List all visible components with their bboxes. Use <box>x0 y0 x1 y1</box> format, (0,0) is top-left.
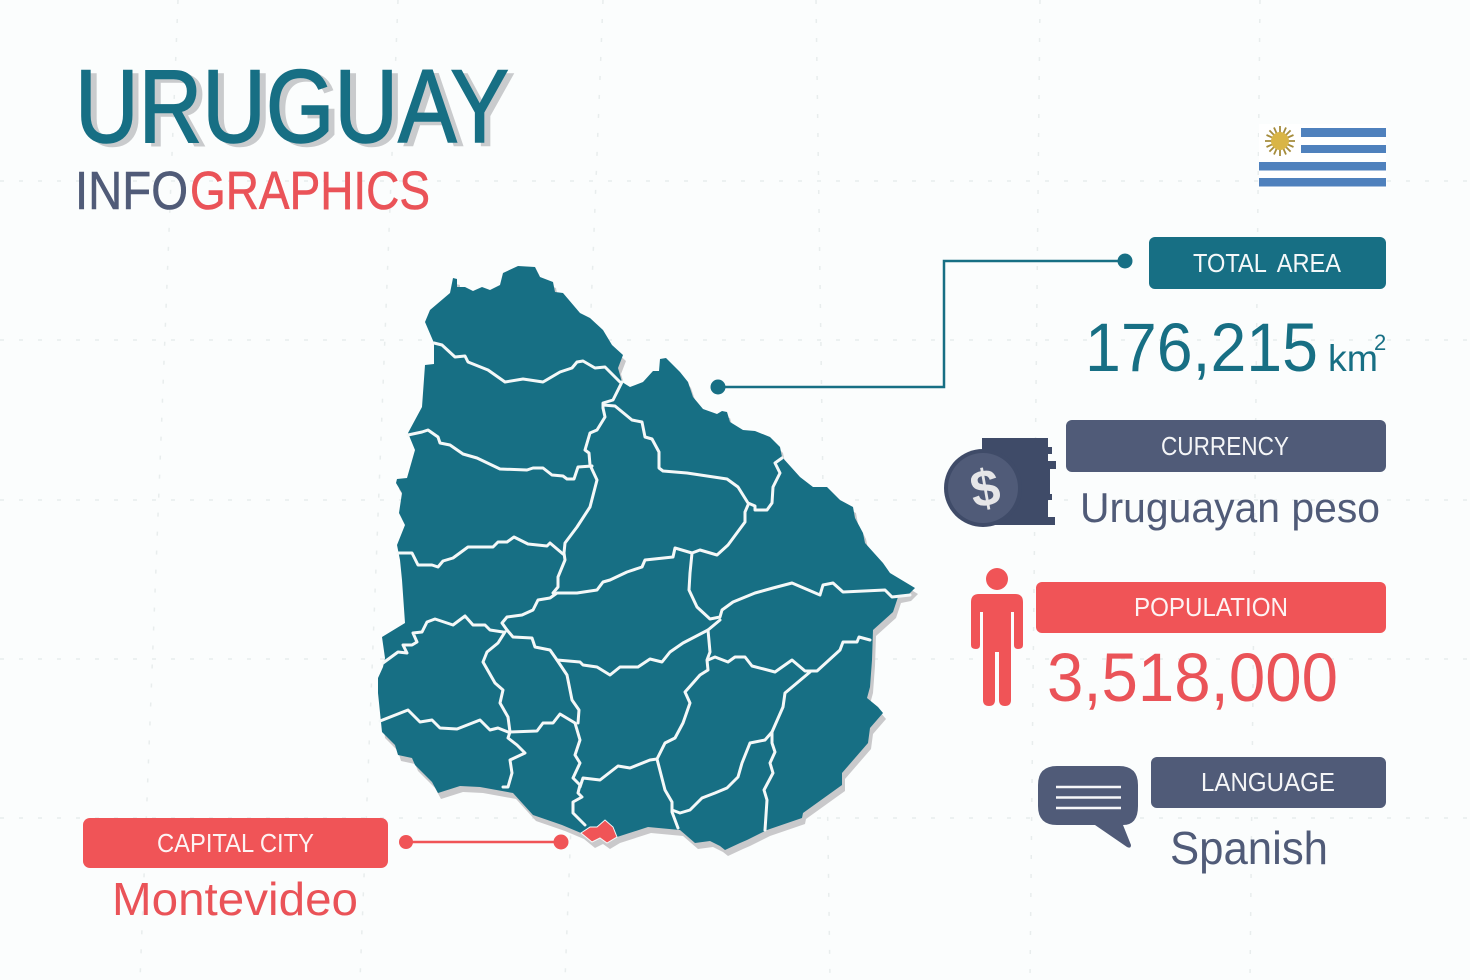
icon: coins: $ <box>966 458 1005 520</box>
label: currency <box>1066 420 1386 472</box>
capital city marker: Montevideo <box>581 820 617 843</box>
subtitle: INFOGRAPHICS: GRAPHICS <box>190 161 430 221</box>
label: total area: TOTAL AREA <box>1193 248 1342 278</box>
value: population: 3,518,000 <box>1047 639 1338 716</box>
panel: capital city <box>83 818 568 925</box>
label: currency: CURRENCY <box>1161 431 1289 461</box>
panel: language <box>1038 757 1386 874</box>
value: total area: 2 <box>1374 330 1386 355</box>
value: capital city: Montevideo <box>112 873 358 925</box>
value: language: Spanish <box>1170 822 1328 874</box>
subtitle: INFOGRAPHICS: INFO <box>75 161 188 221</box>
panel: population <box>971 568 1386 716</box>
label: population <box>1036 582 1386 633</box>
label: capital city <box>83 818 388 868</box>
value: currency: Uruguayan peso <box>1080 484 1380 531</box>
panel: total area <box>710 237 1386 394</box>
icon: speech bubble <box>1038 766 1138 848</box>
department borders <box>380 343 910 830</box>
label: language: LANGUAGE <box>1201 767 1335 797</box>
icon: flag of Uruguay <box>1259 124 1386 188</box>
map shape <box>378 266 915 850</box>
label: total area <box>1149 237 1386 289</box>
subtitle: INFOGRAPHICS <box>75 161 430 221</box>
label: population: POPULATION <box>1134 592 1288 622</box>
leader line: capital city <box>399 834 568 850</box>
panel: currency <box>944 420 1386 531</box>
title: URUGUAY: URUGUAY <box>75 49 509 165</box>
leader line: total area <box>710 254 1132 394</box>
label: capital city: CAPITAL CITY <box>157 828 314 858</box>
title: URUGUAY: URUGUAY <box>81 52 515 168</box>
map of Uruguay <box>378 266 918 856</box>
icon: person <box>971 568 1023 706</box>
value: total area: 176,215 <box>1085 309 1318 386</box>
label: language <box>1151 757 1386 808</box>
value: total area: km <box>1328 338 1378 379</box>
icon: coins <box>944 438 1056 527</box>
map shadow <box>381 272 918 856</box>
